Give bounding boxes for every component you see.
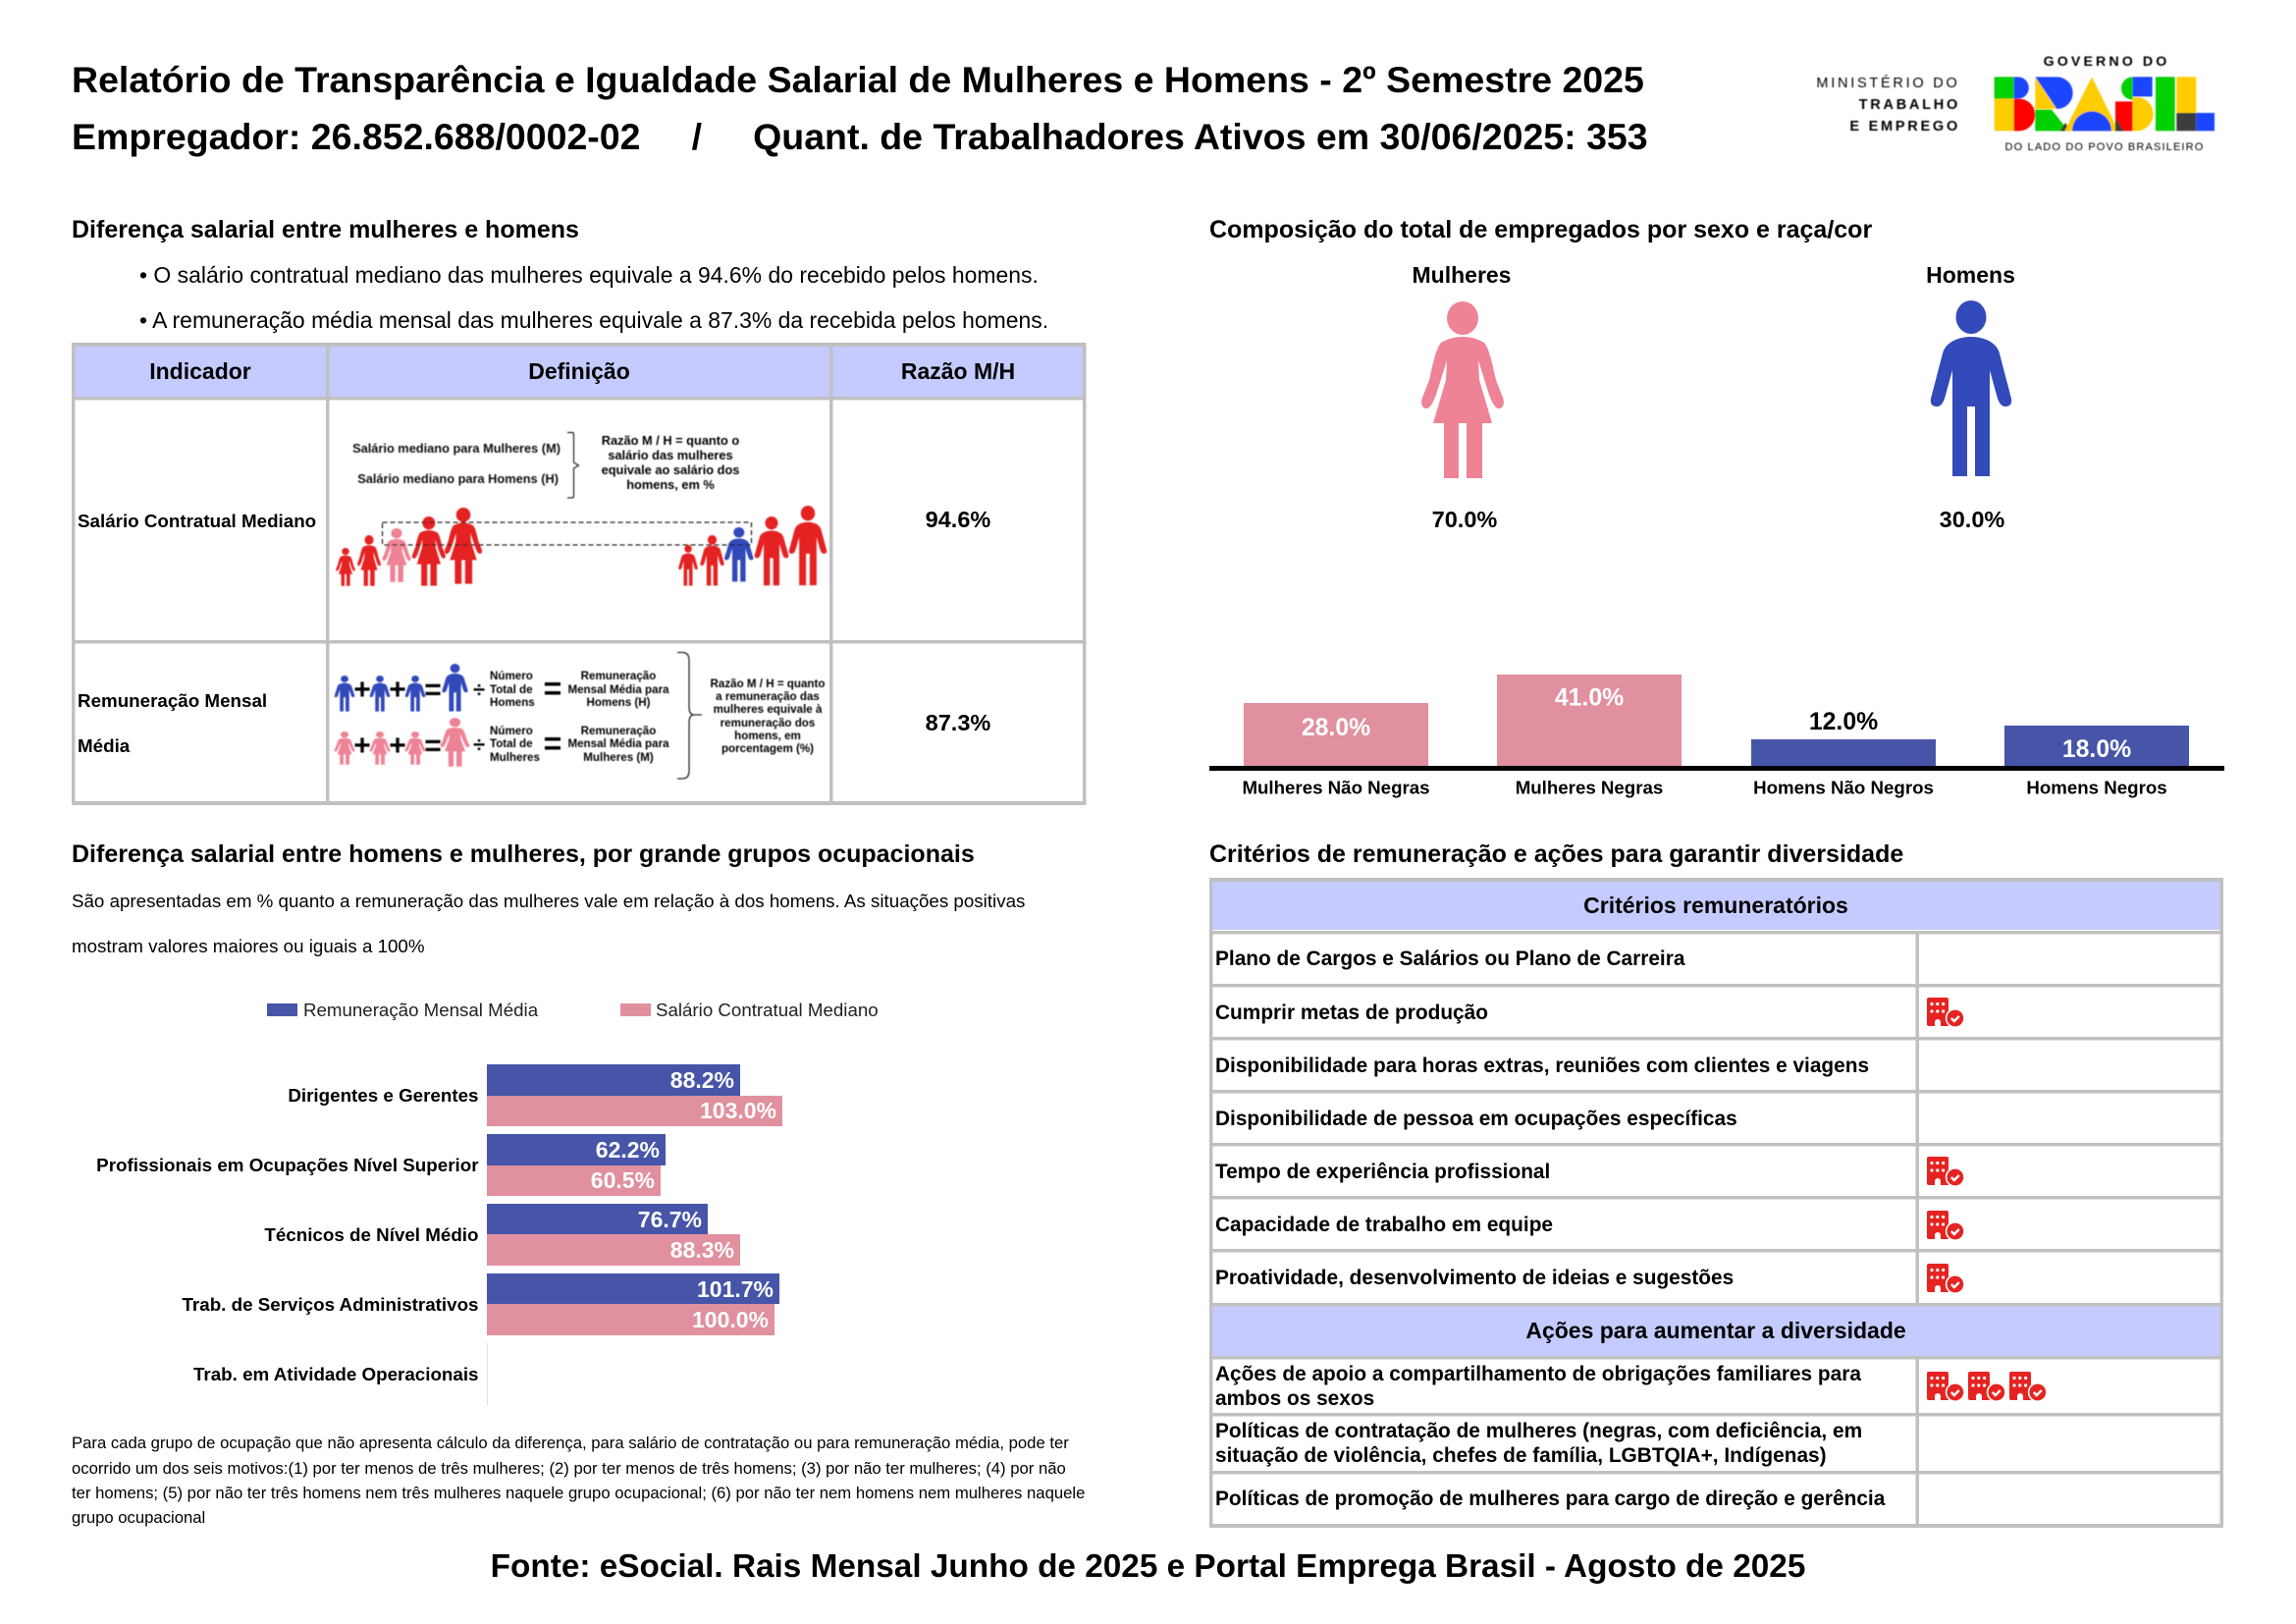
diagram: remuneração média: homens, em <box>734 730 801 742</box>
bar chart: grupos ocupacionais: 101.7% <box>697 1276 774 1302</box>
list: ações: situação de violência, chefes de família, LGBTQIA+, Indígenas) <box>1215 1444 1827 1467</box>
list: ações: Políticas de promoção de mulheres para cargo de direção e gerência <box>1215 1488 1886 1510</box>
legend: Remuneração Mensal Média <box>303 1000 539 1020</box>
logo: ministério do trabalho e emprego: MINISTÉRIO DO <box>1816 75 1959 91</box>
panel: homens <box>1926 262 2015 532</box>
text block: bullet points: • O salário contratual mediano das mulheres equivale a 94.6% do recebido pelos homens. <box>139 262 1039 288</box>
text block: descrição <box>72 891 1025 956</box>
footnote: grupo ocupacional <box>72 1508 205 1527</box>
logo: governo do brasil <box>1995 54 2215 153</box>
diagram: salário mediano: salário das mulheres <box>608 448 733 462</box>
bar chart: grupos ocupacionais: Profissionais em Ocupações Nível Superior <box>96 1155 479 1175</box>
diagram: salário mediano: Salário mediano para Homens (H) <box>357 471 559 486</box>
diagram: remuneração média: ÷ <box>473 732 485 757</box>
diagram: remuneração média: Mulheres (M) <box>583 751 654 764</box>
header: critérios remuneratórios: Critérios remuneratórios <box>1583 893 1848 918</box>
row: remuneração mensal média <box>78 690 990 756</box>
list: critérios: Cumprir metas de produção <box>1215 1001 1488 1024</box>
footnote: ocorrido um dos seis motivos:(1) por ter menos de três mulheres; (2) por ter menos de três homens; (3) por não ter mulheres; (4) por não <box>72 1459 1066 1478</box>
diagram: remuneração média: Total de <box>490 683 533 696</box>
legend <box>267 1000 879 1020</box>
bar chart: grupos ocupacionais: 60.5% <box>591 1167 655 1193</box>
panel: homens: Homens <box>1926 262 2015 288</box>
list: critérios <box>1215 947 1869 1289</box>
row: salário contratual mediano <box>78 507 990 532</box>
bar chart: sexo e raça: Mulheres Negras <box>1516 778 1663 797</box>
list: critérios: Capacidade de trabalho em equipe <box>1215 1214 1553 1236</box>
title <box>72 59 1648 157</box>
panel: mulheres: 70.0% <box>1432 507 1497 532</box>
diagram: remuneração média: = <box>544 726 561 761</box>
bar chart: grupos ocupacionais: 103.0% <box>700 1098 776 1123</box>
icon: man <box>1931 300 2011 476</box>
table header: Definição <box>528 358 630 384</box>
diagram: remuneração média: Homens <box>490 696 535 709</box>
diagram: remuneração média: + <box>353 730 371 762</box>
diagram: remuneração média: Mulheres <box>490 751 540 764</box>
list: critérios: Tempo de experiência profissional <box>1215 1161 1550 1183</box>
logo: governo do brasil: GOVERNO DO <box>2044 54 2169 70</box>
diagram: salário mediano: Razão M / H = quanto o <box>602 433 739 448</box>
text block: bullet points <box>139 262 1048 333</box>
bar chart: sexo e raça: Mulheres Não Negras <box>1242 778 1430 797</box>
row: remuneração mensal média: Média <box>78 735 131 756</box>
title: Empregador: 26.852.688/0002-02 / Quant. de Trabalhadores Ativos em 30/06/2025: 353 <box>72 116 1648 157</box>
list: critérios: Proatividade, desenvolvimento de ideias e sugestões <box>1215 1267 1734 1289</box>
diagram: remuneração média: a remuneração das <box>716 690 820 703</box>
diagram: remuneração média: porcentagem (%) <box>721 742 814 755</box>
diagram: remuneração média: ÷ <box>473 677 485 702</box>
text block: bullet points: • A remuneração média mensal das mulheres equivale a 87.3% da recebida pelos homens. <box>139 307 1048 333</box>
bar chart: sexo e raça: 28.0% <box>1302 715 1370 741</box>
title: Relatório de Transparência e Igualdade Salarial de Mulheres e Homens - 2º Semestre 2025 <box>72 59 1644 100</box>
diagram: salário mediano: equivale ao salário dos <box>602 462 739 477</box>
icons: organização com check <box>1927 998 2048 1402</box>
panel: mulheres: Mulheres <box>1413 262 1511 288</box>
list: critérios: Disponibilidade para horas extras, reuniões com clientes e viagens <box>1215 1055 1869 1077</box>
heading: critérios: Critérios de remuneração e ações para garantir diversidade <box>1209 840 1903 868</box>
table: indicadores <box>72 343 1086 805</box>
bar chart: grupos ocupacionais: Trab. de Serviços Administrativos <box>183 1294 479 1315</box>
footnote <box>72 1434 1085 1527</box>
diagram: remuneração média: Homens (H) <box>586 696 651 709</box>
bar chart: grupos ocupacionais: 62.2% <box>596 1137 660 1163</box>
table header <box>149 358 1015 384</box>
diagram: remuneração média: Remuneração <box>581 670 656 682</box>
row: salário contratual mediano: 94.6% <box>926 507 990 532</box>
diagram: salário mediano: homens, em % <box>626 477 715 492</box>
diagram: remuneração média <box>335 652 825 779</box>
heading: grupos ocupacionais: Diferença salarial entre homens e mulheres, por grande grupos ocupacionais <box>72 840 975 868</box>
bar chart: sexo e raça: Homens Negros <box>2026 778 2167 797</box>
list: ações <box>1215 1363 1886 1510</box>
bar chart: grupos ocupacionais: Dirigentes e Gerentes <box>288 1085 479 1106</box>
diagram: salário mediano <box>336 432 827 586</box>
diagram: remuneração média: Remuneração <box>581 725 656 737</box>
diagram: remuneração média: Mensal Média para <box>567 737 669 750</box>
bar chart: grupos ocupacionais <box>96 1064 782 1405</box>
diagram: remuneração média: Número <box>490 670 533 682</box>
bar chart: grupos ocupacionais: 88.2% <box>670 1067 734 1093</box>
bar chart: grupos ocupacionais: 76.7% <box>638 1207 702 1232</box>
legend: Salário Contratual Mediano <box>656 1000 879 1020</box>
diagram: remuneração média: Mensal Média para <box>567 683 669 696</box>
table header: Razão M/H <box>901 358 1015 384</box>
bar chart: sexo e raça: 18.0% <box>2062 736 2131 763</box>
list: ações: Políticas de contratação de mulheres (negras, com deficiência, em <box>1215 1420 1862 1442</box>
bar chart: grupos ocupacionais: 88.3% <box>670 1237 734 1263</box>
text block: descrição: mostram valores maiores ou iguais a 100% <box>72 936 425 956</box>
row: remuneração mensal média: 87.3% <box>926 710 990 735</box>
row: salário contratual mediano: Salário Contratual Mediano <box>78 511 316 531</box>
diagram: remuneração média: Total de <box>490 737 533 750</box>
list: critérios: Plano de Cargos e Salários ou Plano de Carreira <box>1215 947 1685 970</box>
logo: ministério do trabalho e emprego: E EMPREGO <box>1849 119 1960 135</box>
diagram: remuneração média: = <box>424 674 442 706</box>
diagram: remuneração média: = <box>544 671 561 706</box>
panel: homens: 30.0% <box>1940 507 2004 532</box>
diagram: remuneração média: + <box>389 730 406 762</box>
diagram: remuneração média: remuneração dos <box>721 717 815 730</box>
list: ações: ambos os sexos <box>1215 1387 1374 1410</box>
bar chart: sexo e raça: 41.0% <box>1555 685 1624 711</box>
footnote: Para cada grupo de ocupação que não apresenta cálculo da diferença, para salário de contratação ou para remuneração média, pode ter <box>72 1434 1069 1452</box>
list: ações: Ações de apoio a compartilhamento de obrigações familiares para <box>1215 1363 1861 1385</box>
header: ações: Ações para aumentar a diversidade <box>1525 1318 1906 1343</box>
table header: Indicador <box>149 358 251 384</box>
bar chart: sexo e raça: Homens Não Negros <box>1753 778 1934 797</box>
diagram: salário mediano: Salário mediano para Mulheres (M) <box>352 441 561 456</box>
bar chart: grupos ocupacionais: Trab. em Atividade Operacionais <box>193 1364 479 1384</box>
diagram: remuneração média: Razão M / H = quanto <box>711 677 825 690</box>
footer: fonte: Fonte: eSocial. Rais Mensal Junho de 2025 e Portal Emprega Brasil - Agosto de 2025 <box>491 1548 1805 1585</box>
heading: diferença salarial: Diferença salarial entre mulheres e homens <box>72 216 579 244</box>
text block: descrição: São apresentadas em % quanto a remuneração das mulheres vale em relação à dos homens. As situações positivas <box>72 891 1025 911</box>
table: critérios e ações <box>1209 878 2223 1528</box>
heading: composição: Composição do total de empregados por sexo e raça/cor <box>1209 216 1872 244</box>
bar chart: sexo e raça: 12.0% <box>1809 709 1878 735</box>
bar chart: sexo e raça <box>1209 675 2224 797</box>
row: remuneração mensal média: Remuneração Mensal <box>78 690 267 711</box>
diagram: remuneração média: + <box>353 674 371 706</box>
icon: woman <box>1421 301 1504 478</box>
footnote: ter homens; (5) por não ter três homens nem três mulheres naquele grupo ocupacional; (6) por não ter nem homens nem mulheres naquele <box>72 1484 1085 1502</box>
logo: governo do brasil: DO LADO DO POVO BRASILEIRO <box>2005 141 2204 153</box>
bar chart: grupos ocupacionais: Técnicos de Nível Médio <box>264 1224 479 1245</box>
diagram: remuneração média: Número <box>490 725 533 737</box>
list: critérios: Disponibilidade de pessoa em ocupações específicas <box>1215 1108 1737 1130</box>
diagram: remuneração média: + <box>389 674 406 706</box>
bar chart: grupos ocupacionais: 100.0% <box>692 1307 769 1332</box>
diagram: remuneração média: mulheres equivale à <box>714 703 823 716</box>
diagram: remuneração média: = <box>424 730 442 762</box>
logo: ministério do trabalho e emprego: TRABALHO <box>1859 97 1960 113</box>
logo: ministério do trabalho e emprego <box>1816 75 1960 135</box>
panel: mulheres <box>1413 262 1511 532</box>
